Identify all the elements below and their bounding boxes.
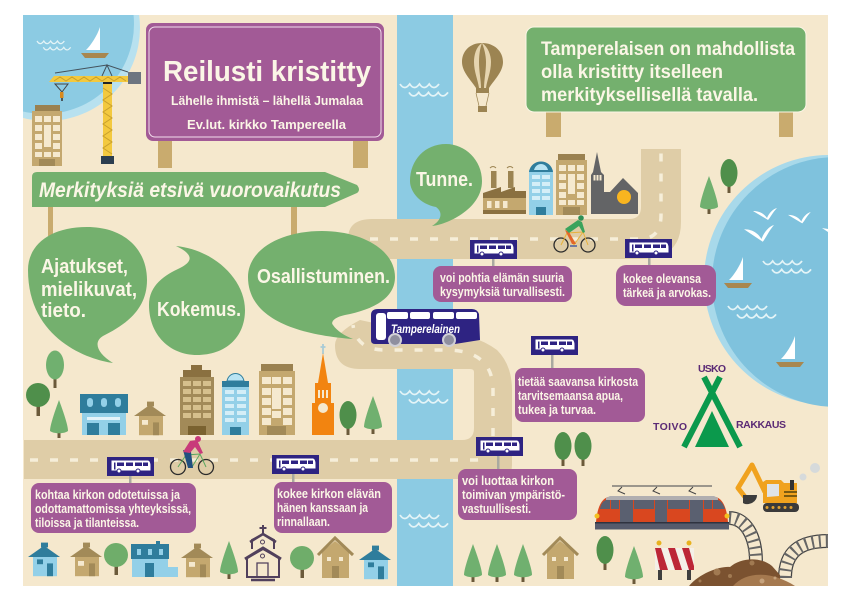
callout: kohtaa kirkon: tiloissa ja tilanteissa. bbox=[35, 516, 139, 530]
callout: voi luottaa: vastuullisesti. bbox=[462, 502, 531, 516]
subtitle: Lähelle ihmistä – lähellä Jumalaa bbox=[171, 94, 364, 108]
callout: tietää saavansa bbox=[515, 368, 645, 422]
bus stop sign 6 bbox=[272, 455, 319, 474]
icon: tower building left bbox=[32, 105, 62, 166]
callout: tietää saavansa: tietää saavansa kirkosta bbox=[518, 375, 639, 389]
callout: kokee kirkon bbox=[274, 482, 392, 533]
callout: kohtaa kirkon: odottamattomissa yhteyksissä, bbox=[35, 502, 191, 516]
callout: voi pohtia bbox=[433, 266, 572, 302]
icon: excavator bbox=[738, 463, 820, 512]
speech bubble: Ajatukset: Ajatukset, bbox=[41, 256, 128, 278]
icon: crane bbox=[49, 65, 141, 164]
callout: kokee kirkon: hänen kanssaan ja bbox=[277, 501, 369, 515]
icon: railway tracks bbox=[729, 518, 828, 578]
bus stop sign 2 bbox=[625, 239, 672, 258]
callout: kohtaa kirkon: kohtaa kirkon odotetuissa ja bbox=[35, 488, 181, 502]
bottom row: white church bbox=[245, 525, 281, 580]
callout: tietää saavansa: tarvitsemaansa apua, bbox=[518, 389, 623, 403]
left street: small brown house bbox=[134, 402, 166, 435]
speech bubble: Tunne bbox=[410, 144, 482, 226]
speech bubble: Kokemus bbox=[149, 246, 245, 355]
callout: kokee olevansa bbox=[616, 265, 716, 306]
callout: kokee kirkon: rinnallaan. bbox=[277, 515, 330, 529]
icon: hot air balloon bbox=[462, 43, 503, 112]
bus stop sign 1 bbox=[470, 240, 517, 259]
label TOIVO: TOIVO bbox=[653, 421, 687, 433]
callout: kokee kirkon: kokee kirkon elävän bbox=[277, 487, 381, 501]
icon: train bbox=[594, 486, 730, 530]
direction sign text: Merkityksiä etsivä vuorovaikutus bbox=[39, 179, 341, 202]
speech bubble: Ajatukset: tieto. bbox=[41, 300, 86, 322]
callout: kohtaa kirkon bbox=[31, 483, 196, 533]
lake: top left bbox=[23, 15, 140, 120]
panel: direction sign bbox=[32, 172, 359, 236]
icon: sailboat top left bbox=[81, 27, 109, 58]
left street: brown tower bbox=[180, 365, 214, 435]
left street: blue tower bbox=[222, 374, 249, 435]
statement text: Tamperelaisen on mahdollista bbox=[541, 38, 795, 60]
road centre dashes bbox=[30, 150, 661, 460]
icon: factory bbox=[483, 166, 526, 214]
label RAKKAUS: RAKKAUS bbox=[736, 419, 786, 431]
callout: voi pohtia: kysymyksiä turvallisesti. bbox=[440, 285, 565, 299]
organisation: Ev.lut. kirkko Tampereella bbox=[187, 118, 347, 132]
callout: voi luottaa bbox=[458, 469, 577, 520]
speech bubble: Kokemus: Kokemus. bbox=[157, 299, 241, 321]
bottom row: gabled house bbox=[318, 538, 353, 578]
left street: orange church bbox=[312, 344, 334, 435]
left street: trees bbox=[26, 350, 382, 438]
bus stop sign 4 bbox=[476, 437, 523, 456]
icon: tan tower bbox=[556, 154, 587, 215]
icon: cyclist pink bbox=[170, 436, 214, 474]
small waves bbox=[37, 41, 811, 527]
speech bubble: Tunne: Tunne. bbox=[416, 169, 473, 191]
statement text: merkityksellisellä tavalla. bbox=[541, 84, 758, 106]
statement text: olla kristitty itselleen bbox=[541, 61, 723, 83]
icon: dirt piles bbox=[689, 559, 795, 586]
panel: statement sign bbox=[526, 27, 806, 137]
icon: grey church bbox=[591, 152, 638, 214]
right bottom: trees bbox=[464, 159, 738, 584]
bus label: Tamperelainen bbox=[391, 324, 460, 336]
speech bubble: Ajatukset bbox=[28, 227, 147, 363]
speech bubble: Ajatukset: mielikuvat, bbox=[41, 279, 137, 301]
label USKO: USKO bbox=[698, 363, 726, 375]
title: Reilusti kristitty bbox=[163, 56, 371, 88]
bus stop sign 3 bbox=[531, 336, 578, 355]
icon: blue tower bbox=[529, 162, 553, 215]
callout: kokee olevansa: tärkeä ja arvokas. bbox=[623, 286, 711, 300]
bus stop posts bbox=[129, 257, 650, 483]
icon: faith hope love symbol bbox=[653, 363, 786, 447]
icon: road barrier bbox=[655, 540, 694, 580]
lake: right bbox=[705, 155, 828, 407]
statement text bbox=[541, 38, 795, 106]
right bottom: gabled house bbox=[543, 538, 578, 579]
icon: birds bbox=[744, 208, 828, 242]
panel: title sign bbox=[146, 23, 384, 168]
callout: voi luottaa: voi luottaa kirkon bbox=[462, 474, 554, 488]
bus stop sign 5 bbox=[107, 457, 154, 476]
speech bubble: Osallistuminen bbox=[248, 231, 395, 339]
callout: voi pohtia: voi pohtia elämän suuria bbox=[440, 271, 565, 285]
river bbox=[397, 15, 453, 586]
icon: tram bus Tamperelainen bbox=[371, 309, 480, 346]
speech bubble: Osallistuminen: Osallistuminen. bbox=[257, 266, 390, 288]
icon: cyclist green bbox=[554, 215, 595, 252]
left street: tan tower bbox=[259, 364, 295, 435]
callout: tietää saavansa: tukea ja turvaa. bbox=[518, 403, 596, 417]
road network bbox=[24, 149, 681, 479]
callout: voi luottaa: toimivan ympäristö- bbox=[462, 488, 565, 502]
icon: sailboat lake 2 bbox=[776, 336, 804, 367]
left street: blue apartment house bbox=[80, 394, 128, 435]
bottom row: blue house bbox=[131, 541, 178, 577]
callout: kokee olevansa: kokee olevansa bbox=[623, 272, 702, 286]
bottom row: houses and trees bbox=[28, 541, 391, 579]
icon: sailboat lake 1 bbox=[724, 257, 752, 288]
